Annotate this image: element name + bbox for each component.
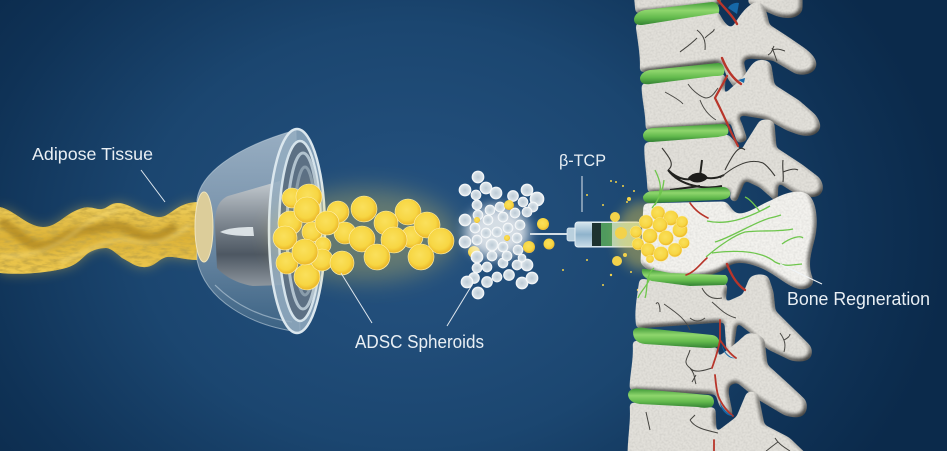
leader line: beta-TCP <box>581 176 583 212</box>
sparkle particles <box>562 180 639 291</box>
label: beta-TCP: β-TCP <box>559 151 606 170</box>
warm glow at injection site <box>616 202 668 270</box>
dome shell <box>197 130 300 332</box>
barrel <box>575 222 640 247</box>
beta-TCP white sphere cluster <box>459 171 544 299</box>
blue vessel accents <box>720 3 745 416</box>
dome lower highlight <box>215 285 292 322</box>
vertebra 7 <box>628 392 812 451</box>
vertebra 2 <box>642 60 820 143</box>
adipose tissue strand <box>0 202 197 274</box>
leader line: adipose tissue <box>141 170 165 202</box>
inner cylinder <box>215 181 284 286</box>
spine column <box>628 0 823 451</box>
bone yellow spheroids <box>630 206 690 263</box>
rim rings <box>279 141 321 321</box>
vertebra 3 <box>645 120 823 202</box>
striped end <box>612 223 640 246</box>
ADSC spheroids: yellow <box>273 184 454 290</box>
regenerated bone section <box>641 192 816 289</box>
syringe <box>530 222 640 247</box>
green nerve fibres <box>706 197 803 265</box>
top vertebra fragment <box>634 0 802 18</box>
green nerve strands over disc 4 <box>638 170 664 298</box>
leader line: spheroids left <box>341 273 372 323</box>
green contents <box>601 223 612 246</box>
blood vessels <box>686 0 745 451</box>
vertebra 6 <box>630 334 806 418</box>
needle <box>530 233 568 235</box>
label: Bone Regneration: Bone Regneration <box>787 289 930 309</box>
central white glow of beta-TCP cluster <box>465 206 529 258</box>
needle highlight <box>220 227 254 236</box>
yellow spheroid behind beta-TCP cluster <box>468 246 480 258</box>
leader line: spheroids right <box>447 285 472 326</box>
label: ADSC Spheroids: ADSC Spheroids <box>355 332 484 352</box>
outer rim <box>269 129 325 333</box>
hub <box>567 228 576 241</box>
microfluidic dome device <box>195 129 325 333</box>
dark contents <box>592 223 601 246</box>
vertebra 1 <box>636 2 816 88</box>
intervertebral discs <box>629 3 729 407</box>
leader line: bone regeneration <box>780 264 822 284</box>
tissue end cap <box>195 192 213 262</box>
vertebra 5 <box>636 275 811 361</box>
yellow spheroids among cluster and near needle <box>474 200 554 253</box>
yellow glow behind spheroids <box>273 189 457 281</box>
label: Adipose Tissue: Adipose Tissue <box>32 144 153 164</box>
